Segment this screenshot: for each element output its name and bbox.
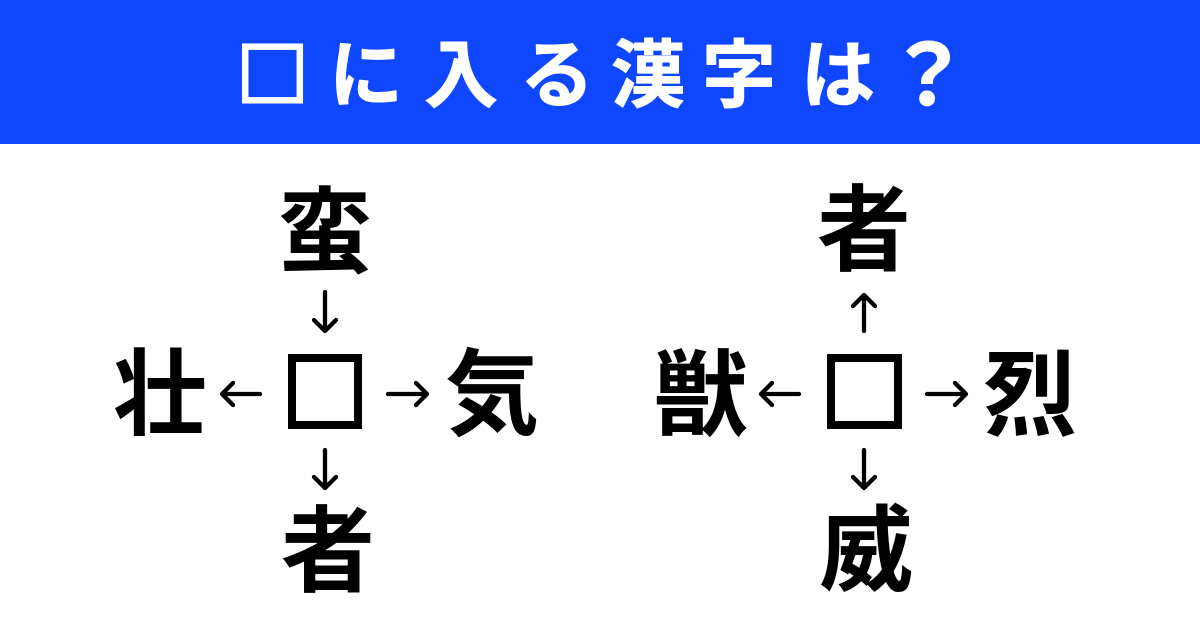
blank box	[831, 358, 898, 425]
kanji right: 気	[445, 342, 539, 447]
kanji left: 獣	[654, 343, 748, 448]
title text: 漢	[611, 34, 685, 117]
kanji bottom: 者	[281, 499, 375, 604]
title text: は	[801, 34, 875, 117]
puzzle: right	[654, 178, 1077, 603]
title text: ？	[886, 29, 970, 123]
title text	[329, 29, 970, 123]
kanji top: 者	[817, 178, 911, 283]
puzzle: left	[113, 180, 539, 604]
title text: る	[520, 34, 594, 117]
kanji bottom: 威	[819, 498, 913, 603]
kanji left: 壮	[113, 342, 207, 447]
arrows	[222, 292, 427, 488]
arrows	[761, 295, 966, 488]
title text: 入	[424, 34, 498, 117]
kanji top: 蛮	[278, 180, 372, 285]
blank box	[292, 358, 358, 425]
title text: に	[329, 34, 403, 117]
title banner	[0, 0, 1200, 144]
title blank box	[245, 47, 300, 100]
kanji right: 烈	[983, 343, 1077, 448]
title text: 字	[702, 34, 776, 117]
